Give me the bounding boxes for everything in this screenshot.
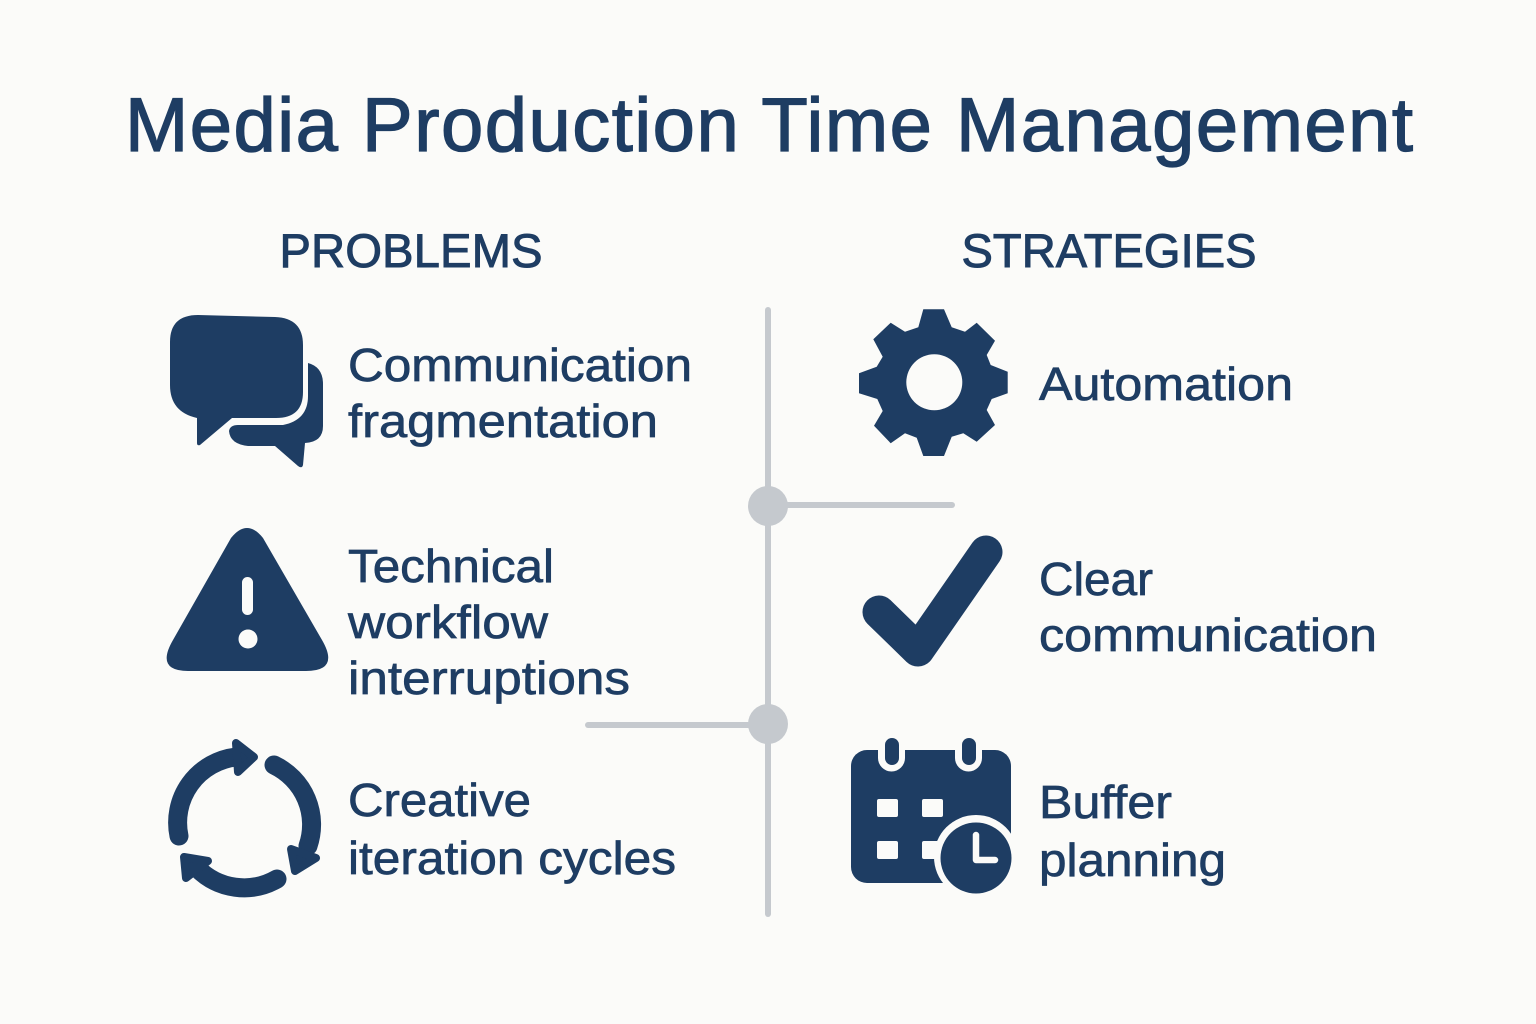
text: technical workflow interruptions: workflow [347, 596, 549, 648]
icon: gear [859, 309, 1008, 456]
heading: strategies: STRATEGIES [962, 224, 1256, 277]
text: communication fragmentation: fragmentation [348, 395, 658, 447]
heading: problems: PROBLEMS [280, 224, 542, 277]
text: buffer planning: planning [1039, 834, 1226, 886]
text: technical workflow interruptions: Technical [348, 540, 554, 592]
text: creative iteration cycles [348, 774, 676, 884]
text: buffer planning: Buffer [1039, 776, 1172, 828]
text: buffer planning [1039, 776, 1226, 886]
icon: chat bubbles [170, 315, 323, 467]
text: clear communication: Clear [1039, 553, 1153, 605]
central timeline [585, 307, 955, 917]
icon: checkmark [879, 552, 986, 650]
text: creative iteration cycles: Creative [348, 774, 531, 826]
text: technical workflow interruptions [347, 540, 630, 704]
text: clear communication: communication [1039, 609, 1377, 661]
icon: cycle arrows [178, 743, 316, 888]
text: automation: Automation [1039, 358, 1293, 410]
text: clear communication [1039, 553, 1377, 661]
title: Media Production Time Management [125, 83, 1413, 168]
text: technical workflow interruptions: interruptions [348, 652, 630, 704]
text: communication fragmentation: Communication [348, 339, 692, 391]
icon: calendar with clock [851, 738, 1018, 899]
text: communication fragmentation [348, 339, 692, 447]
text: creative iteration cycles: iteration cycles [348, 832, 676, 884]
icon: warning triangle [167, 528, 328, 671]
